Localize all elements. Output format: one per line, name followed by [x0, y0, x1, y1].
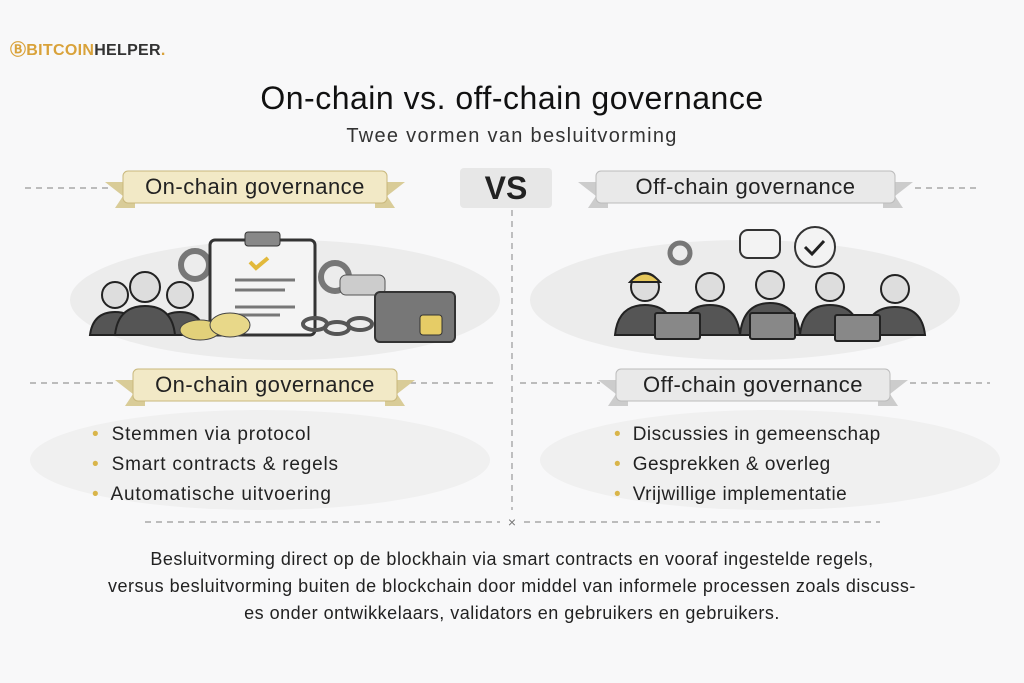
banner: on-chain top: On-chain governance — [145, 174, 365, 199]
bullet list: off-chain: • Gesprekken & overleg — [614, 454, 831, 475]
illustration: off-chain (people with laptops, speech bubbles) — [614, 226, 926, 342]
bullet list: off-chain: • Vrijwillige implementatie — [614, 484, 847, 505]
bullet list: on-chain: • Automatische uitvoering — [92, 484, 332, 505]
banner: on-chain second — [115, 368, 415, 406]
title: On-chain vs. off-chain governance — [260, 80, 764, 116]
banner: on-chain top — [105, 170, 405, 208]
summary paragraph: versus besluitvorming buiten de blockchain door middel van informele processen zoals discuss- — [108, 576, 916, 596]
logo: ⒷBITCOINHELPER. — [10, 42, 166, 59]
summary paragraph — [108, 549, 916, 623]
bullet list: on-chain: • Smart contracts & regels — [92, 454, 339, 475]
bullet list: off-chain — [614, 424, 881, 505]
banner: on-chain second: On-chain governance — [155, 372, 375, 397]
bullet list: on-chain: • Stemmen via protocol — [92, 424, 311, 445]
banner: off-chain top: Off-chain governance — [636, 174, 855, 199]
summary paragraph: Besluitvorming direct op de blockhain via smart contracts en vooraf ingestelde regels, — [150, 549, 874, 569]
decorative dashed lines & backdrops: × — [508, 514, 516, 530]
bullet list: on-chain — [92, 424, 339, 505]
VS badge: VS — [485, 170, 527, 206]
illustration: on-chain (people, clipboard, coins, chain, lock) — [88, 232, 456, 343]
VS badge — [460, 168, 552, 208]
banner: off-chain second — [598, 368, 908, 406]
subtitle: Twee vormen van besluitvorming — [346, 125, 678, 147]
banner: off-chain top — [578, 170, 913, 208]
summary paragraph: es onder ontwikkelaars, validators en gebruikers en gebruikers. — [244, 603, 780, 623]
banner: off-chain second: Off-chain governance — [643, 372, 863, 397]
bullet list: off-chain: • Discussies in gemeenschap — [614, 424, 881, 445]
